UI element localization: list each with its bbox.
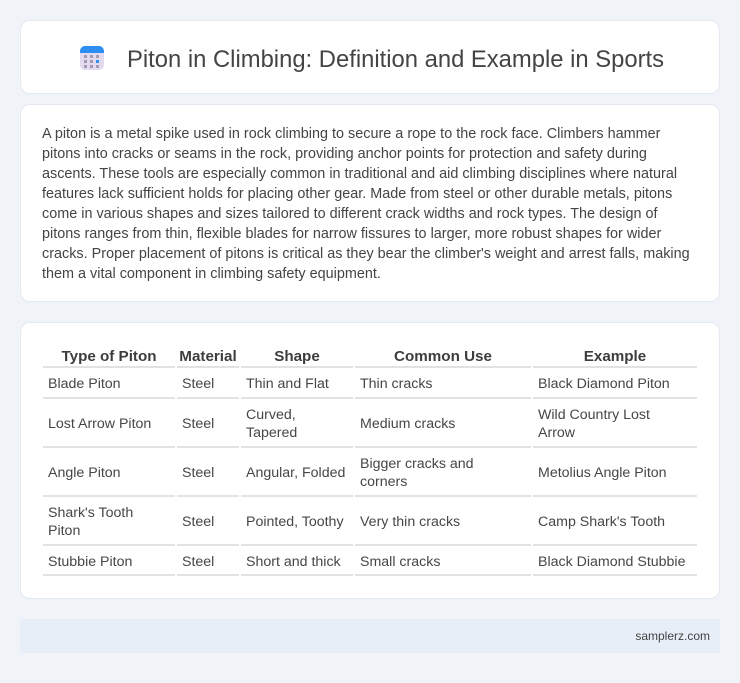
table: piton types: Black Diamond Stubbie: [538, 554, 685, 570]
table: piton types: Arrow: [538, 425, 575, 441]
table: piton types: [43, 348, 697, 576]
table: piton types: Shark's Tooth: [48, 505, 133, 521]
text block: description: pitons ranges from thin, flexible blades for narrow fissures to larger, more robust shapes for wider: [42, 226, 661, 242]
header row: Type of Piton: [61, 348, 157, 365]
text block: description: ascents. These tools are especially common in traditional and aid climbing disciplines where natural: [42, 166, 677, 182]
footer text: samplerz.com: [635, 629, 710, 643]
table: piton types: Tapered: [246, 425, 297, 441]
table: piton types: Thin cracks: [360, 376, 433, 392]
table: piton types: Black Diamond Piton: [538, 376, 670, 392]
table: piton types: Metolius Angle Piton: [538, 465, 667, 481]
header row: Example: [584, 348, 646, 365]
table: piton types: Small cracks: [360, 554, 440, 570]
table: piton types: Angular, Folded: [246, 465, 345, 481]
text block: description: come in various shapes and sizes tailored to different crack widths and rock types. The design of: [42, 206, 658, 222]
header row: Shape: [274, 348, 320, 365]
table: piton types: Pointed, Toothy: [246, 514, 344, 530]
table: piton types: Steel: [182, 514, 214, 530]
panel: header: [20, 20, 720, 94]
table: piton types: Camp Shark's Tooth: [538, 514, 665, 530]
table: piton types: Blade Piton: [48, 376, 121, 392]
text block: description: cracks. Proper placement of pitons is critical as they bear the climber's weight and arrest falls, making: [42, 246, 690, 262]
header row: Material: [179, 348, 237, 365]
header row: Common Use: [394, 348, 492, 365]
table: piton types: Short and thick: [246, 554, 341, 570]
text block: description: them a vital component in climbing safety equipment.: [42, 266, 381, 282]
table: piton types: Bigger cracks and: [360, 456, 474, 472]
table: piton types: Wild Country Lost: [538, 407, 650, 423]
table: piton types: Lost Arrow Piton: [48, 416, 151, 432]
table: piton types: Steel: [182, 376, 214, 392]
table: piton types: Angle Piton: [48, 465, 121, 481]
text block: description: A piton is a metal spike used in rock climbing to secure a rope to the rock face. Climbers hammer: [42, 126, 660, 142]
text block: description: features lack sufficient holds for placing other gear. Made from steel or other durable metals, pitons: [42, 186, 672, 202]
table: piton types: Piton: [48, 523, 80, 539]
text block: description: [42, 126, 690, 282]
icon: calendar: [80, 46, 104, 70]
title: Piton in Climbing: Definition and Example in Sports: [127, 46, 664, 73]
table: piton types: Curved,: [246, 407, 296, 423]
table: piton types: Medium cracks: [360, 416, 455, 432]
table: piton types: corners: [360, 474, 407, 490]
table: piton types: Thin and Flat: [246, 376, 329, 392]
table: piton types: Stubbie Piton: [48, 554, 132, 570]
table: piton types: Steel: [182, 554, 214, 570]
panel: table: [20, 322, 720, 599]
footer bar: [20, 619, 720, 653]
table: piton types: Steel: [182, 416, 214, 432]
table: piton types: Very thin cracks: [360, 514, 460, 530]
text block: description: pitons into cracks or seams in the rock, providing anchor points for protection and safety during: [42, 146, 647, 162]
table: piton types: Steel: [182, 465, 214, 481]
header row: [61, 348, 646, 365]
panel: description: [20, 104, 720, 302]
